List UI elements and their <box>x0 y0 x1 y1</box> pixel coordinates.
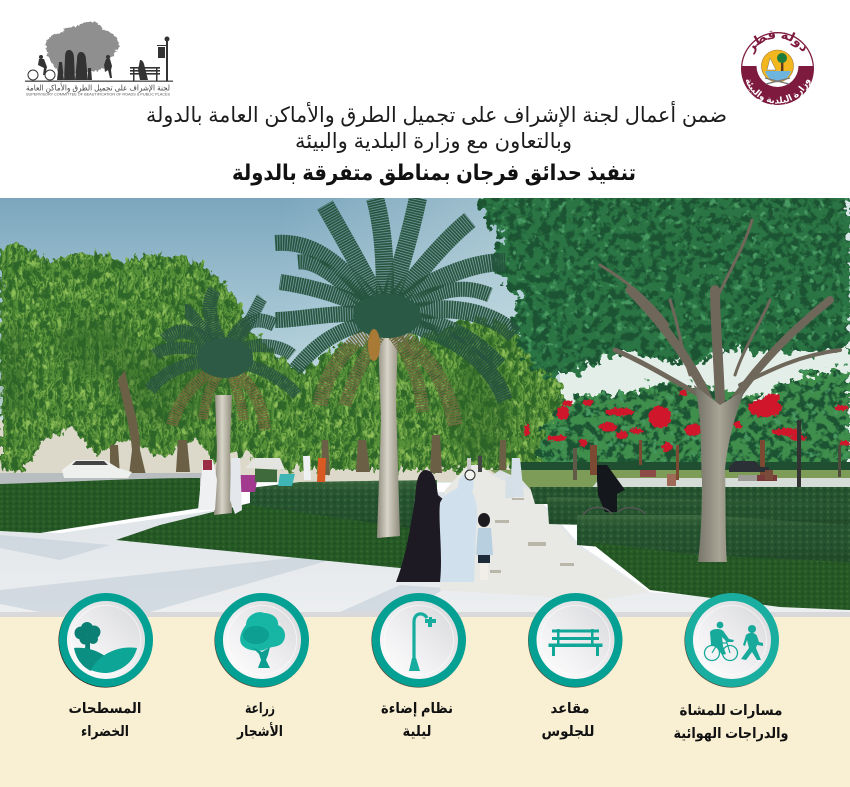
palm large trunk <box>377 335 400 538</box>
hedge row 3 shading <box>577 515 850 565</box>
label: tracks line 2: والدراجات الهوائية <box>674 726 788 742</box>
big tree branches <box>600 220 840 420</box>
palm large crown <box>353 294 421 338</box>
emblem national seal <box>762 50 794 84</box>
icon: green areas <box>58 593 153 688</box>
bicycle wheels <box>583 507 645 515</box>
logo: supervisory committee <box>25 22 173 96</box>
shadow stripes on pavement <box>0 535 445 612</box>
central lawn <box>116 500 437 568</box>
willow trees left <box>0 245 570 472</box>
photo: park rendering <box>0 198 850 612</box>
palm small trunk <box>214 395 232 515</box>
label: lighting line 2: ليلية <box>402 724 432 740</box>
tree on hill <box>74 622 100 650</box>
red flame trees <box>524 390 850 452</box>
intro line 2: وبالتعاون مع وزارة البلدية والبيئة <box>295 130 572 153</box>
palm small fronds solid under layer <box>150 290 297 395</box>
back road <box>0 473 230 487</box>
background trunks and posts <box>573 420 841 490</box>
label: green areas line 2: الخضراء <box>81 724 129 740</box>
background parked cars and benches <box>640 461 777 486</box>
central path paving <box>440 465 648 600</box>
palm large lower brown fronds <box>320 325 455 425</box>
woman in abaya <box>396 470 444 582</box>
icon: night lighting <box>371 593 466 688</box>
logo ground line <box>25 80 173 82</box>
left hedge shading <box>250 480 437 532</box>
palm tree small <box>150 290 297 515</box>
family foreground <box>396 470 493 582</box>
icon: benches <box>528 593 622 688</box>
pale horizon on right <box>560 340 850 480</box>
logo bench and lamp <box>130 36 170 81</box>
palm large fronds feathers <box>275 198 515 400</box>
lamp head <box>425 617 436 627</box>
man in thobe <box>440 474 477 582</box>
child <box>476 513 493 580</box>
child on path <box>505 477 514 498</box>
emblem disc <box>741 32 814 105</box>
cyclist <box>704 622 738 660</box>
palm small lower brown fronds <box>172 365 265 430</box>
tree crown shade <box>243 626 269 644</box>
grey strip under photo <box>0 612 850 618</box>
tree crown <box>240 612 285 651</box>
icon: pedestrian and cycle tracks <box>684 593 779 688</box>
labels <box>68 701 788 742</box>
background lawn and plaza <box>490 470 850 490</box>
label: tree planting: زراعة <box>245 701 275 717</box>
left lawn <box>0 478 200 533</box>
lamp base <box>409 658 420 671</box>
man headscarf <box>465 470 475 480</box>
label: benches line 2: للجلوس <box>542 724 594 740</box>
path tile marks <box>490 498 574 573</box>
pale sky towards right <box>280 198 850 483</box>
hedge row 1 <box>530 487 850 504</box>
label: benches: مقاعد <box>550 701 590 717</box>
cyclist body <box>597 465 625 512</box>
palm small fronds feathers <box>150 290 297 395</box>
palm tree large <box>275 198 515 538</box>
hill front <box>91 647 137 673</box>
bench <box>548 629 602 656</box>
lamp post <box>414 614 427 660</box>
main heading: تنفيذ حدائق فرجان بمناطق متفرقة بالدولة <box>232 160 636 186</box>
person orange <box>317 458 326 482</box>
background people <box>62 456 524 514</box>
logo english name: SUPERVISORY COMMITTEE OF BEAUTIFICATION OF ROADS & PUBLIC PLACES <box>26 92 170 96</box>
emblem white inner ring <box>756 45 798 87</box>
hedge row 2 <box>547 497 850 528</box>
emblem arabic ministry name: وزارة البلدية والبيئة <box>746 80 811 105</box>
intro line 1: ضمن أعمال لجنة الإشراف على تجميل الطرق والأماكن العامة بالدولة <box>146 101 727 127</box>
icon: tree planting <box>214 593 309 688</box>
cyclist <box>583 465 645 515</box>
man with red headscarf <box>198 460 217 510</box>
left hedge <box>250 480 437 532</box>
small coloured paving <box>238 475 258 492</box>
man far white <box>303 456 311 480</box>
car far <box>245 458 285 470</box>
header text block <box>146 101 727 186</box>
distant wall <box>0 420 560 482</box>
emblem white upper area <box>742 33 813 66</box>
label: tracks: مسارات للمشاة <box>680 703 782 719</box>
label: green areas: المسطحات <box>68 701 142 717</box>
logo arabic name: لجنة الإشراف على تجميل الطرق والأماكن العامة <box>26 82 170 94</box>
man behind palm <box>230 458 242 514</box>
man on path <box>510 458 524 497</box>
big tree canopy <box>480 190 850 374</box>
willow trunks <box>110 370 506 500</box>
main pavement <box>0 470 850 612</box>
hedge row 3 <box>577 515 850 565</box>
tree trunk <box>252 647 270 668</box>
logo people silhouettes <box>28 50 148 80</box>
cream footer panel <box>0 617 850 787</box>
hill back <box>74 648 105 671</box>
car windows <box>72 461 108 465</box>
back hedge strip <box>520 462 850 472</box>
label: lighting: نظام إضاءة <box>381 701 453 717</box>
ground cover <box>590 542 850 610</box>
emblem arabic state name: دولة قطر <box>752 30 806 55</box>
label: tree planting line 2: الأشجار <box>236 722 283 740</box>
hedge row 2 shading <box>547 497 850 528</box>
logo tree crown <box>46 22 119 76</box>
walker <box>741 625 763 660</box>
palm small crown <box>197 338 253 378</box>
logo: ministry emblem <box>741 30 814 105</box>
background trees right <box>538 369 850 470</box>
sky <box>0 198 850 483</box>
right hedges <box>530 487 850 610</box>
car left <box>62 460 132 478</box>
far walkers <box>467 458 471 472</box>
willow shadow patches <box>0 315 510 460</box>
big tree trunk <box>694 385 745 562</box>
date cluster <box>368 329 380 361</box>
palm large fronds solid under layer <box>275 198 515 400</box>
